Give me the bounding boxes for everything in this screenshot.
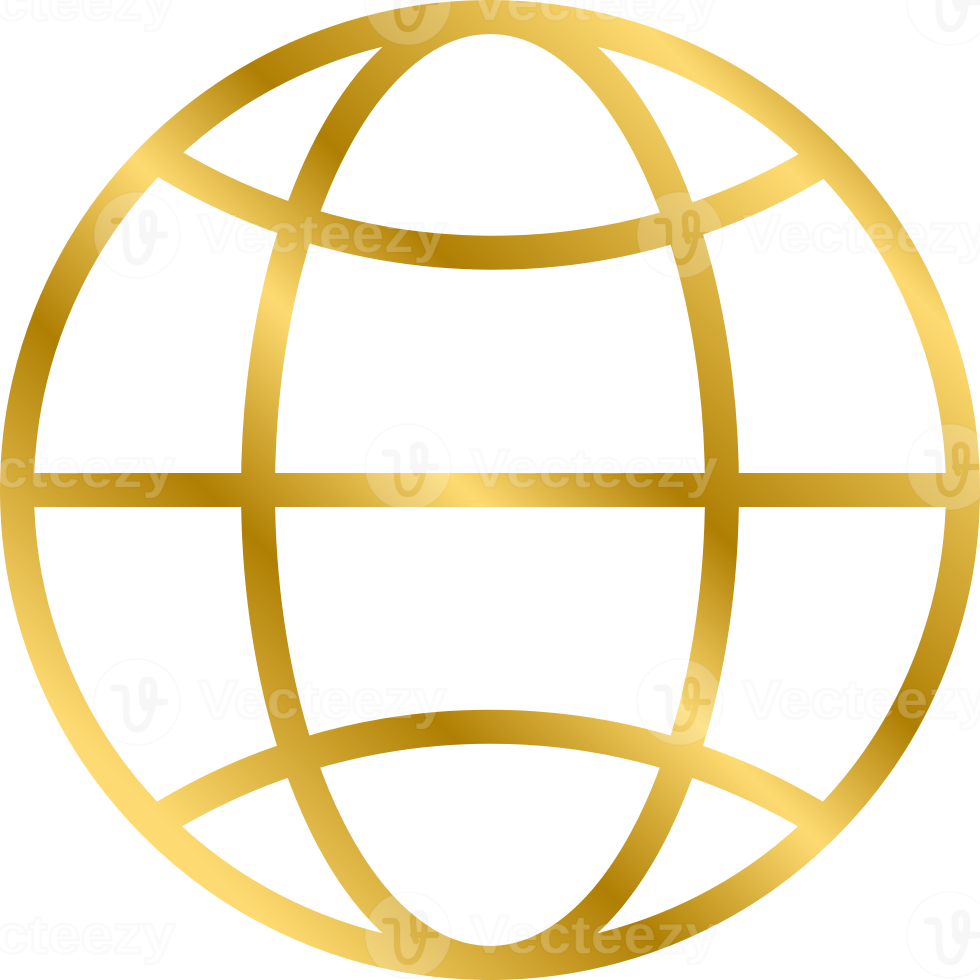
watermark text: Vecteezy <box>198 670 446 730</box>
watermark text: Vecteezy <box>198 204 446 264</box>
watermark text: Vecteezy <box>742 670 980 730</box>
globe equator line <box>17 473 963 507</box>
globe lower latitude arc <box>150 727 830 826</box>
globe central meridian ellipse <box>258 17 722 963</box>
globe upper latitude arc <box>150 152 830 253</box>
watermark text: Vecteezy <box>470 439 718 499</box>
watermark text: Vecteezy <box>470 905 718 965</box>
watermark text: Vecteezy <box>742 204 980 264</box>
